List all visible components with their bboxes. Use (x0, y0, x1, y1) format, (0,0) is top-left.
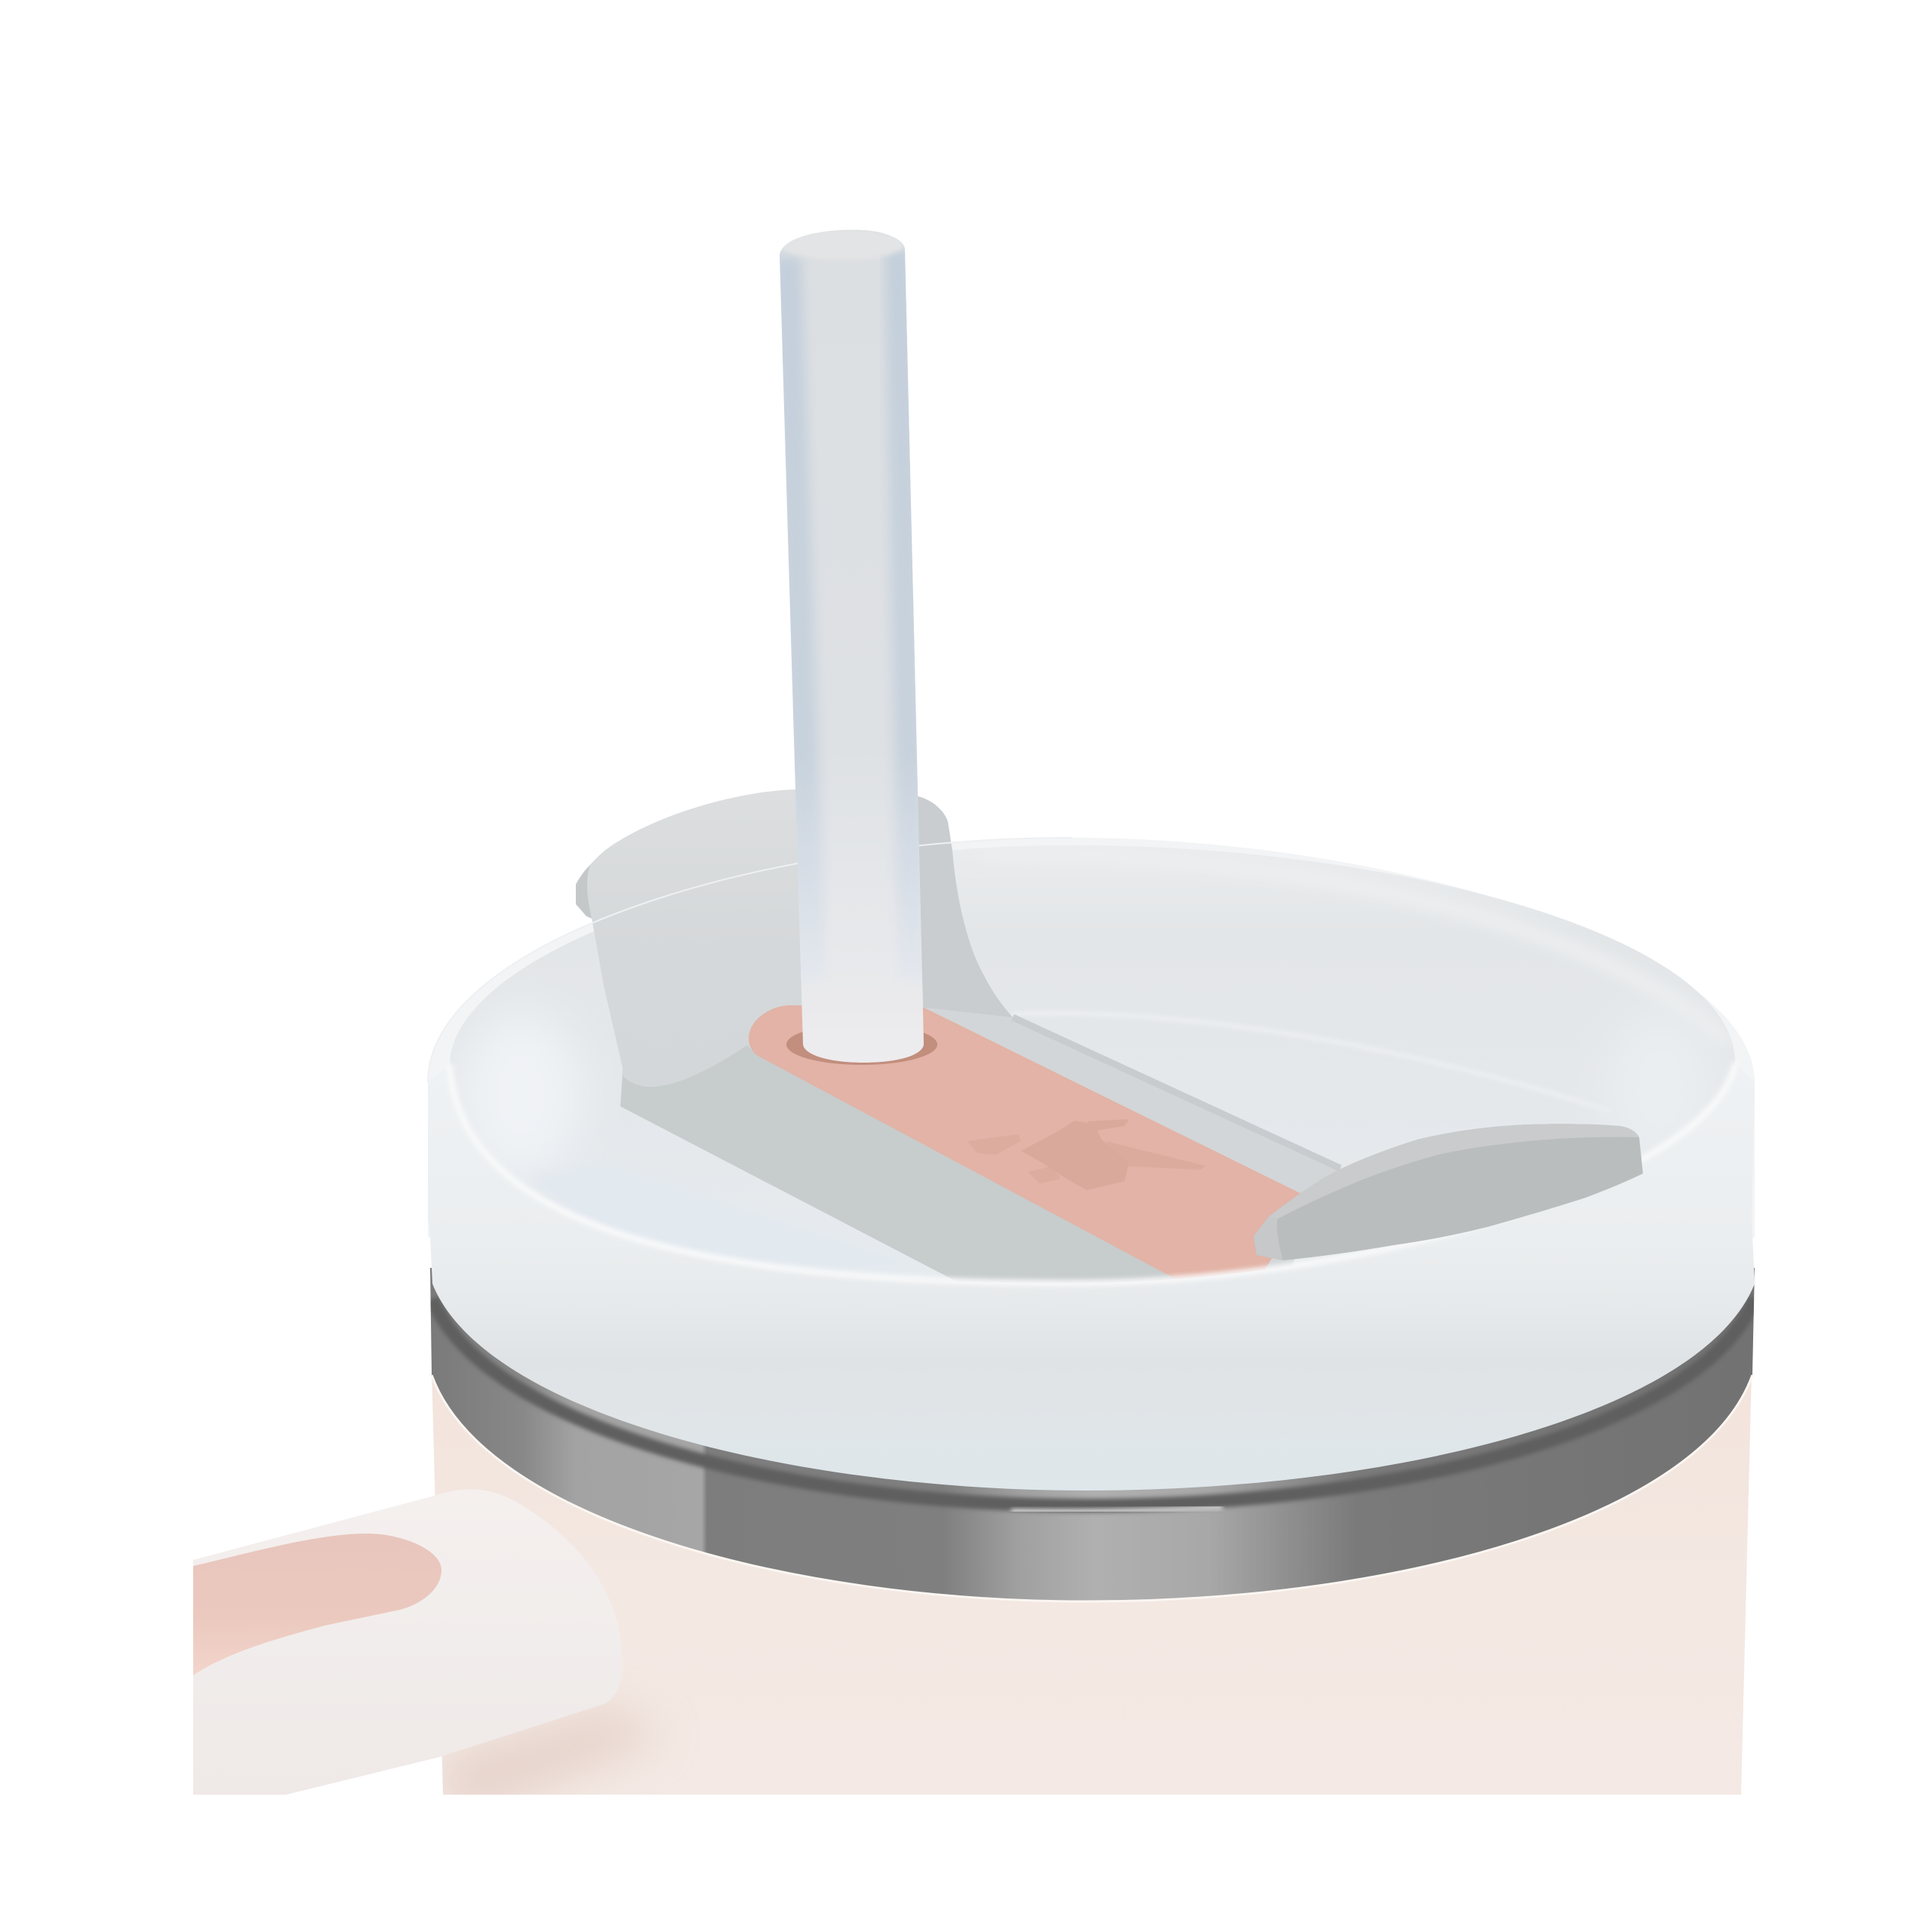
straw cap (788, 240, 903, 256)
right arm of the strip (924, 1008, 1340, 1200)
lid front wall (428, 838, 1755, 1491)
straw right edge shading (881, 248, 921, 947)
side handle (193, 1489, 623, 1795)
upright flap (576, 789, 1340, 1283)
flip straw holder (576, 789, 1340, 1294)
left arm of the strip (620, 1045, 1223, 1294)
tab end cap (1254, 1217, 1283, 1260)
tab upper face (1269, 1124, 1639, 1219)
straw edge shading (780, 254, 821, 948)
straw (774, 229, 928, 1063)
flap shaded back side (914, 795, 1013, 1017)
tumbler body (432, 1371, 1752, 1811)
pink inlay (749, 1005, 1309, 1292)
rim lip highlight (450, 1063, 1735, 1283)
flap left edge (576, 865, 592, 918)
slot hole (786, 1024, 937, 1065)
lid back rim (428, 838, 1755, 1283)
product illustration: tumbler lid with straw (193, 229, 1755, 1795)
right thumb tab (1254, 1124, 1643, 1260)
handle pink grip (193, 1534, 441, 1675)
bird logo (968, 1119, 1206, 1190)
steel band (430, 1268, 1755, 1601)
lid inner floor and wall shading (460, 853, 1728, 1268)
